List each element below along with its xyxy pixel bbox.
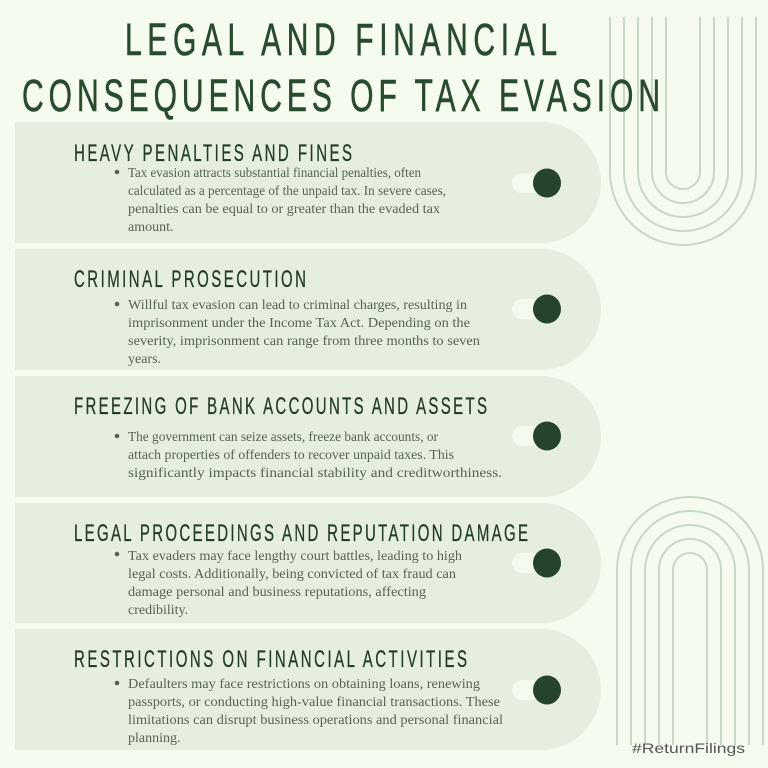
text block: imprisonment under the Income Tax Act. Depending on the xyxy=(128,316,470,331)
panel: legal proceedings xyxy=(15,503,601,623)
icon: toggle dot xyxy=(512,168,561,198)
text block: Tax evaders may face lengthy court battles, leading to high xyxy=(128,549,462,564)
text block: legal costs. Additionally, being convicted of tax fraud can xyxy=(128,567,456,582)
heading: LEGAL PROCEEDINGS AND REPUTATION DAMAGE xyxy=(74,521,528,547)
text block: Willful tax evasion can lead to criminal charges, resulting in xyxy=(128,298,467,313)
heading: FREEZING OF BANK ACCOUNTS AND ASSETS xyxy=(74,394,487,420)
text block: credibility. xyxy=(128,603,188,618)
text block: years. xyxy=(128,352,161,367)
text block xyxy=(115,430,502,481)
text block xyxy=(115,298,480,367)
icon: toggle dot xyxy=(512,422,561,450)
icon: toggle dot xyxy=(512,676,561,704)
icon: toggle dot xyxy=(512,548,561,578)
text block: severity, imprisonment can range from three months to seven xyxy=(128,334,480,349)
heading: HEAVY PENALTIES AND FINES xyxy=(74,141,352,167)
heading: CRIMINAL PROSECUTION xyxy=(74,267,306,293)
text block: amount. xyxy=(128,220,174,235)
text block: The government can seize assets, freeze bank accounts, or xyxy=(128,430,438,445)
text block: planning. xyxy=(128,731,180,746)
icon: toggle dot xyxy=(512,294,561,324)
text block: calculated as a percentage of the unpaid tax. In severe cases, xyxy=(128,184,446,199)
text block: penalties can be equal to or greater than the evaded tax xyxy=(128,202,440,217)
text block xyxy=(115,549,462,618)
heading: RESTRICTIONS ON FINANCIAL ACTIVITIES xyxy=(74,647,467,673)
decoration: bottom arch lines xyxy=(617,497,763,745)
panel: freezing accounts xyxy=(15,376,601,497)
text block: passports, or conducting high-value financial transactions. These xyxy=(128,695,500,710)
text block: Defaulters may face restrictions on obtaining loans, renewing xyxy=(128,677,480,692)
text block xyxy=(115,677,503,746)
text block: attach properties of offenders to recover unpaid taxes. This xyxy=(128,448,454,463)
title: CONSEQUENCES OF TAX EVASION xyxy=(22,71,660,122)
title xyxy=(22,15,660,122)
text block: limitations can disrupt business operations and personal financial xyxy=(128,713,503,728)
text block: damage personal and business reputations, affecting xyxy=(128,585,426,600)
text block xyxy=(115,166,446,235)
decoration: top U lines xyxy=(610,17,756,245)
hashtag: #ReturnFilings xyxy=(632,740,745,756)
panel: criminal prosecution xyxy=(15,249,601,370)
text block: significantly impacts financial stability and creditworthiness. xyxy=(128,466,502,481)
title: LEGAL AND FINANCIAL xyxy=(125,15,557,66)
panel: restrictions xyxy=(15,629,601,750)
panel: heavy penalties xyxy=(15,122,601,243)
text block: Tax evasion attracts substantial financial penalties, often xyxy=(128,166,421,181)
